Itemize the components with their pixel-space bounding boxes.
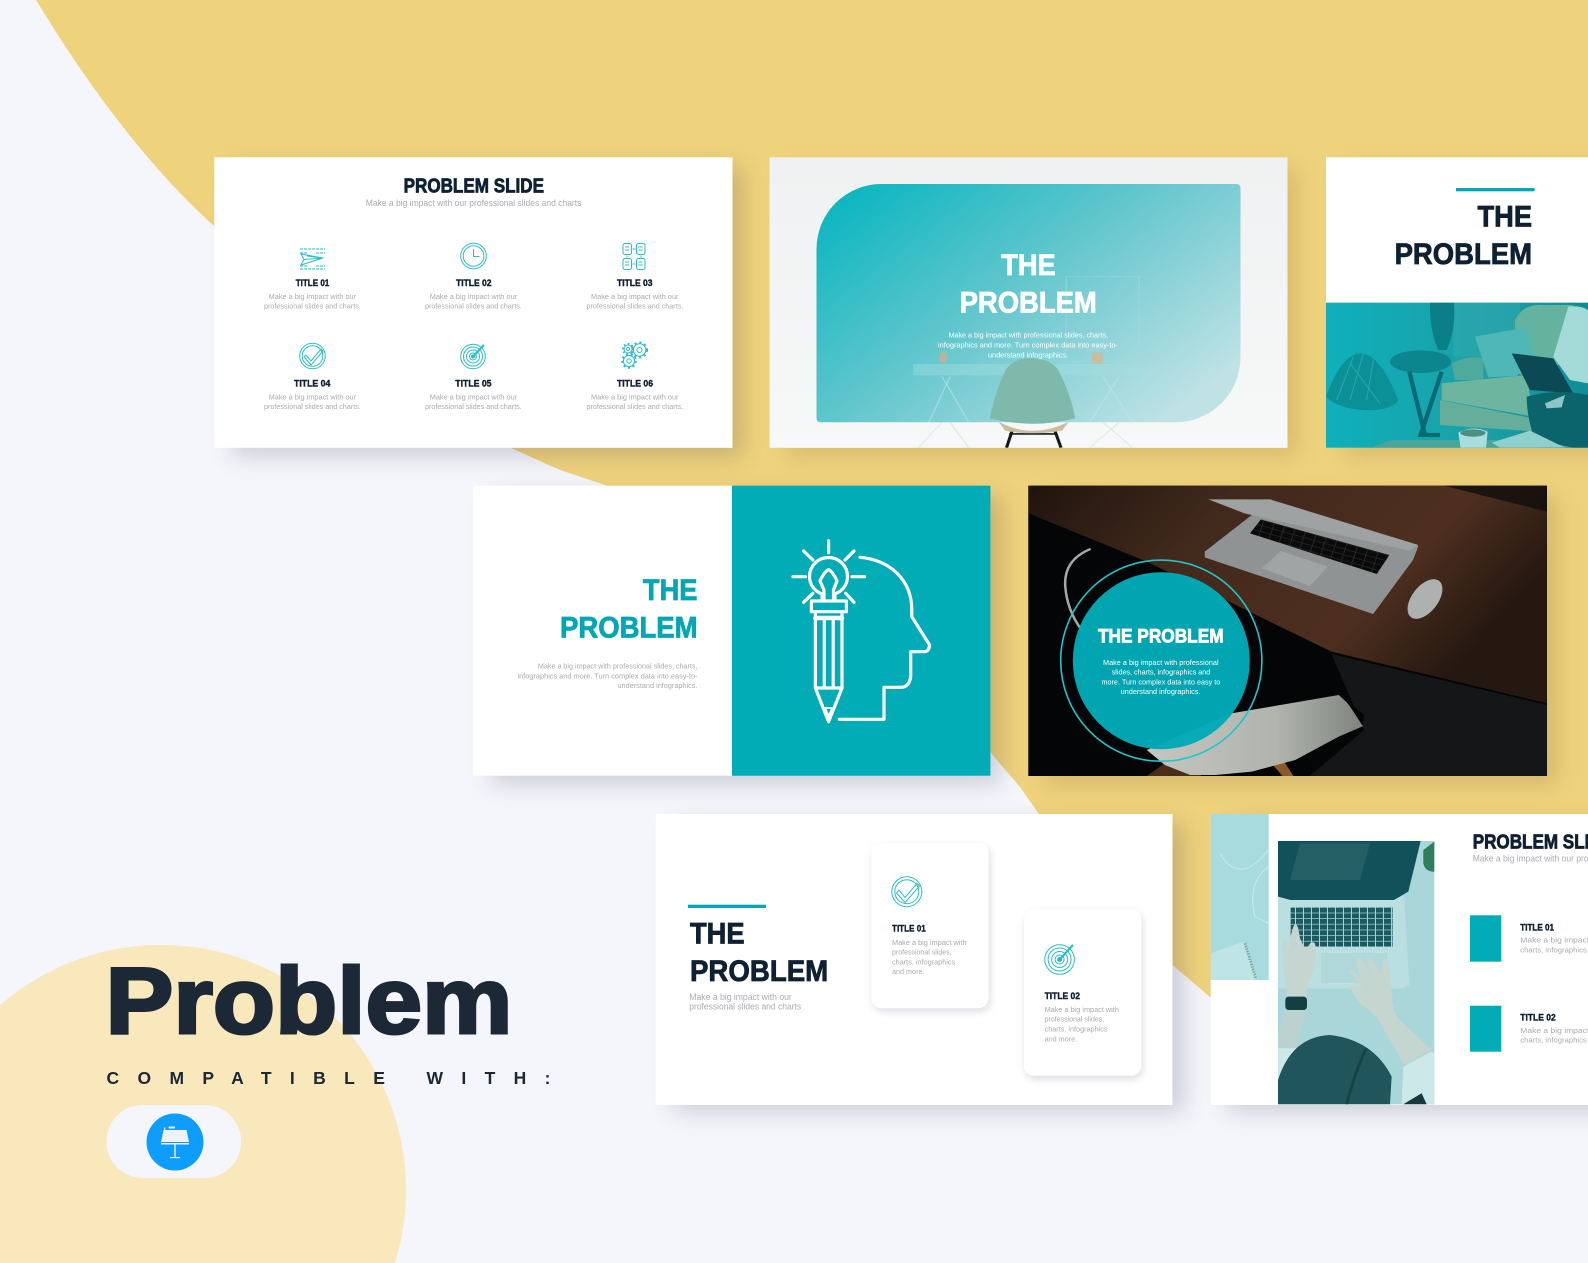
slide title: THE (690, 917, 745, 950)
panel: slide 2 desk photo: PROBLEM (960, 287, 1097, 320)
compatible with label: COMPATIBLE WITH: (106, 1068, 550, 1088)
item 05: Make a big impact with our (430, 392, 518, 401)
slide text: infographics and more. Turn complex data into easy-to- (938, 340, 1118, 349)
item 04: TITLE 04 (294, 379, 331, 389)
icon: paper plane (300, 249, 325, 269)
slide text (689, 992, 801, 1012)
heading: PROBLEM SLIDE (404, 176, 544, 198)
slide text: understand infographics. (988, 350, 1068, 359)
item 04: professional slides and charts. (264, 402, 361, 411)
panel: slide 2 desk photo (770, 157, 1297, 456)
photo: laptop from above (1278, 841, 1434, 1104)
item 01: TITLE 01 (296, 278, 329, 288)
panel: slide 4 head illustration: PROBLEM (560, 611, 698, 644)
item 01: Make a big impact with our (269, 292, 357, 301)
card 1 (871, 843, 990, 1012)
list item 1 (1520, 923, 1588, 954)
keynote badge (106, 1105, 241, 1178)
item 06: TITLE 06 (617, 379, 653, 389)
slide text: Make a big impact with professional slides, charts, (948, 331, 1108, 340)
subheading: Make a big impact with our professional slides and charts (366, 198, 582, 208)
desk scene (918, 422, 1132, 448)
card 1 text: TITLE 01 (892, 924, 926, 934)
desk, frame and chair (913, 277, 1143, 448)
item 03: Make a big impact with our (591, 292, 679, 301)
main title: Problem (106, 948, 512, 1053)
card 1 text: professional slides, (892, 948, 952, 957)
panel: slide 6 cards (656, 814, 1184, 1112)
card 1 text: and more. (892, 967, 924, 976)
item 02: professional slides and charts. (425, 302, 522, 311)
icon: mouse (1401, 573, 1449, 625)
icon: clock (461, 243, 486, 269)
card 1 text: charts, infographics (892, 957, 955, 966)
card 1 text: Make a big impact with (892, 938, 967, 947)
slide text: understand infographics. (618, 681, 698, 690)
card 2 text: Make a big impact with (1045, 1005, 1119, 1014)
card 2 text: professional slides, (1045, 1015, 1104, 1024)
slide text (518, 661, 698, 690)
icon: check circle (892, 877, 922, 907)
yellow background shape (36, 0, 1588, 1000)
panel: slide 3 the problem (1326, 157, 1588, 456)
item 06: Make a big impact with our (591, 392, 679, 401)
icon: target (1045, 945, 1074, 974)
item 03: TITLE 03 (617, 278, 652, 288)
slide text: Make a big impact with professional slides, charts, (538, 661, 698, 670)
item 04 (264, 379, 361, 411)
item 02: TITLE 02 (456, 278, 492, 288)
card 2 text (1045, 991, 1119, 1043)
panel: slide 7 photo and list (1211, 814, 1588, 1112)
item 05: professional slides and charts. (425, 402, 522, 411)
list item 2: TITLE 02 (1520, 1013, 1556, 1023)
item 03 (586, 278, 683, 311)
card 2 text: TITLE 02 (1045, 991, 1080, 1001)
panel: slide 1 problem slide (214, 157, 742, 456)
card 1 text (892, 924, 967, 976)
circle outline (1061, 560, 1262, 761)
slide text: Make a big impact with professional (1103, 658, 1219, 667)
item 06 (586, 379, 683, 411)
list item 2 (1520, 1013, 1588, 1045)
slide title: THE (1478, 201, 1532, 234)
item 05 (425, 379, 522, 411)
card 2 text: charts, infographics (1045, 1025, 1108, 1034)
panel: slide 6 cards: PROBLEM (690, 955, 828, 988)
teal block 2 (1470, 1006, 1501, 1052)
panel: slide 3 the problem: PROBLEM (1395, 238, 1532, 271)
icon: target (461, 344, 485, 369)
pale yellow circle (0, 945, 406, 1263)
slide title: THE (643, 574, 698, 607)
accent bar (688, 905, 766, 908)
slide text: more. Turn complex data into easy to (1102, 677, 1220, 686)
slide text: infographics and more. Turn complex data into easy-to- (518, 671, 698, 680)
icon: head with bulb and pencil (793, 541, 930, 722)
slide text: professional slides and charts (689, 1002, 801, 1012)
card 2 (1024, 909, 1143, 1079)
slide text: understand infographics. (1121, 687, 1200, 696)
panel: slide 4 head illustration (473, 486, 1001, 784)
panel: slide 5 dark desk photo (1028, 486, 1556, 784)
photo: living room (1326, 303, 1588, 450)
item 02: Make a big impact with our (430, 292, 518, 301)
photo: laptop, mouse and chair (1029, 486, 1547, 776)
slide title: THE (1001, 249, 1056, 282)
teal circle (1073, 572, 1250, 749)
photo: small desk photo (1211, 814, 1269, 980)
slide text: slides, charts, infographics and (1112, 668, 1210, 677)
slide text (938, 331, 1118, 359)
teal panel (816, 184, 1241, 422)
teal block 1 (1470, 915, 1501, 962)
icon: keynote (146, 1114, 204, 1170)
item 04: Make a big impact with our (269, 392, 357, 401)
item 01: professional slides and charts. (264, 302, 361, 311)
list item 1: TITLE 01 (1520, 923, 1554, 933)
item 02 (425, 278, 522, 311)
slide text (1102, 658, 1220, 696)
icon: flow boxes (623, 244, 645, 270)
icon: gears (622, 342, 647, 368)
slide text: Make a big impact with our (689, 992, 792, 1002)
icon: check circle (300, 343, 325, 369)
item 06: professional slides and charts. (586, 402, 683, 411)
card 2 text: and more. (1045, 1034, 1077, 1043)
item 03: professional slides and charts. (586, 302, 683, 311)
accent bar (1456, 188, 1535, 191)
slide title: THE PROBLEM (1098, 626, 1224, 648)
item 01 (264, 278, 361, 311)
item 05: TITLE 05 (455, 379, 492, 389)
